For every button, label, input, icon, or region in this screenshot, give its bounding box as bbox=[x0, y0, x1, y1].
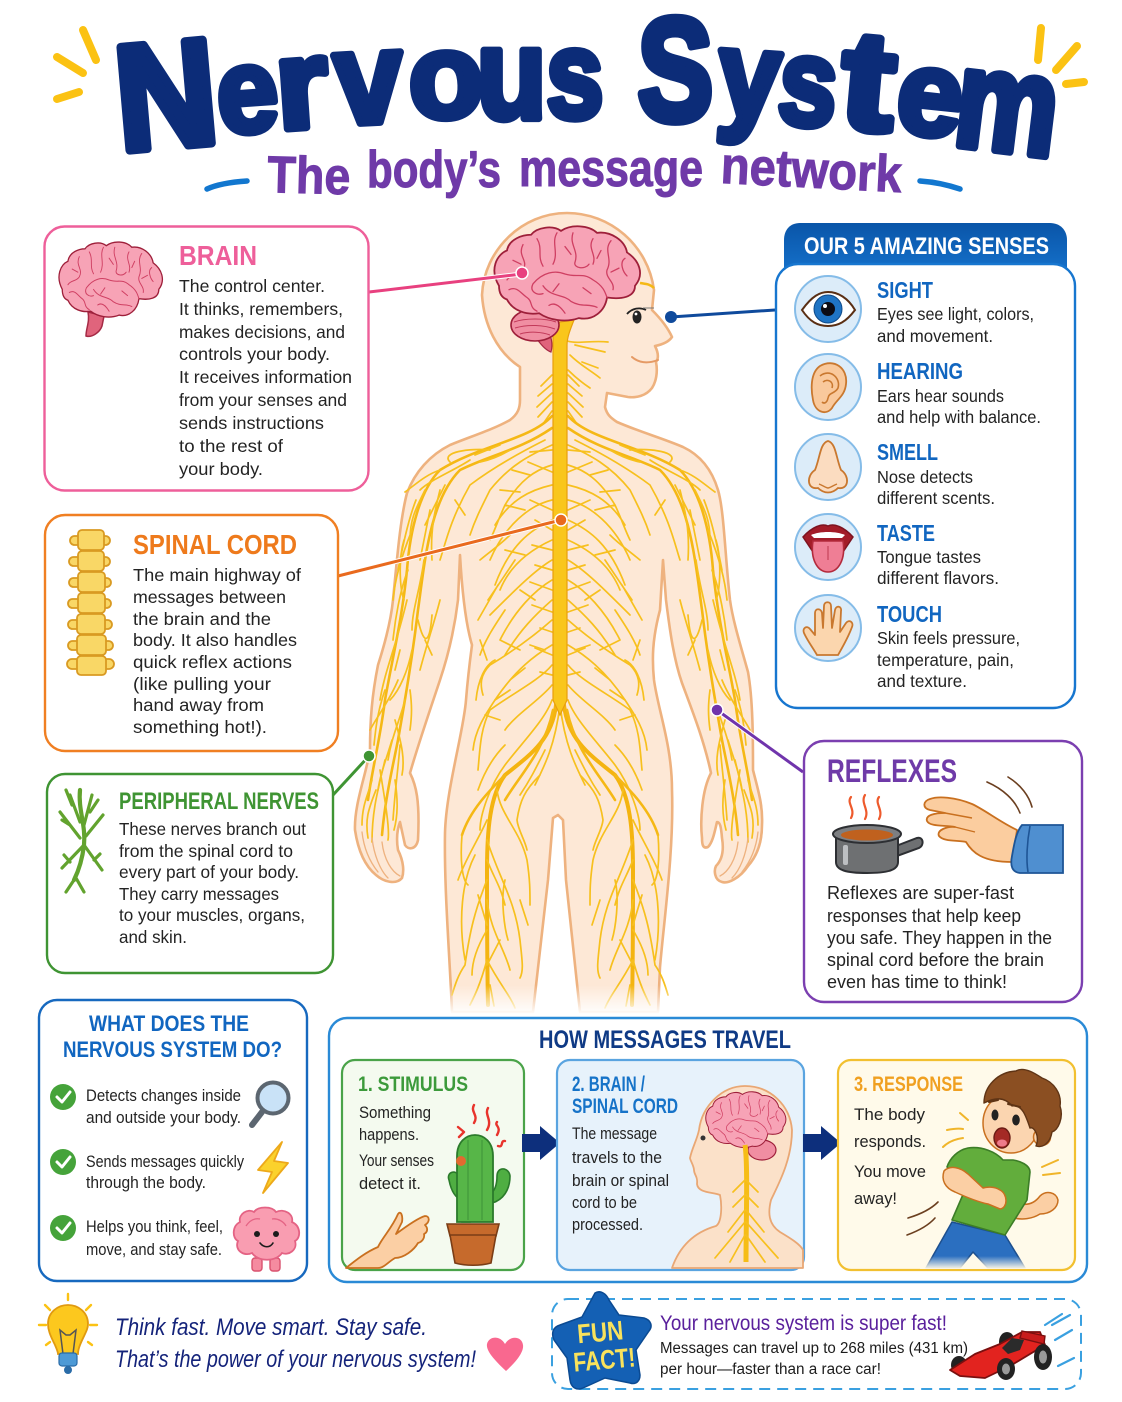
step 2: brain or spinal bbox=[572, 1172, 669, 1190]
sense: hearing bbox=[795, 354, 1041, 427]
step 2: travels to the bbox=[572, 1149, 662, 1167]
heading: SPINAL CORD bbox=[133, 529, 297, 560]
item: sends: Sends messages quickly bbox=[86, 1153, 245, 1171]
panel: spinal cord bbox=[45, 515, 338, 751]
item: detects: Detects changes inside bbox=[86, 1087, 241, 1105]
sunburst left bbox=[57, 30, 96, 99]
heading: WHAT DOES THE bbox=[89, 1011, 249, 1036]
icon: hand pulling away bbox=[924, 777, 1063, 873]
panel: brain bbox=[44, 226, 368, 490]
icon: race car bbox=[950, 1314, 1074, 1380]
sense: taste bbox=[795, 514, 999, 588]
text block: (like pulling your bbox=[133, 674, 271, 694]
connector: senses bbox=[665, 310, 775, 323]
shirt bbox=[947, 1148, 1030, 1235]
cerebellum bbox=[511, 309, 559, 341]
text block bbox=[179, 276, 352, 479]
jeans bbox=[926, 1222, 1025, 1268]
icon: hand bbox=[346, 1213, 429, 1268]
subtitle bbox=[267, 137, 903, 206]
heading: u bbox=[477, 2, 546, 146]
step 3: 3. RESPONSE bbox=[854, 1073, 963, 1096]
panel: how messages travel bbox=[329, 1018, 1087, 1282]
heading: s bbox=[773, 12, 844, 154]
sense: smell: Nose detects bbox=[877, 467, 973, 487]
heading: PERIPHERAL NERVES bbox=[119, 788, 319, 815]
text block: something hot!). bbox=[133, 717, 267, 737]
text block bbox=[133, 565, 301, 737]
icon: magnifying glass bbox=[252, 1082, 288, 1125]
sense: sight: SIGHT bbox=[877, 277, 933, 303]
sense: touch: and texture. bbox=[877, 671, 967, 691]
icon: hot pot bbox=[833, 795, 923, 873]
text block: you safe. They happen in the bbox=[827, 928, 1052, 948]
subtitle dashes bbox=[207, 181, 960, 189]
body diagram bbox=[355, 213, 762, 1015]
badge: star: FACT! bbox=[572, 1342, 636, 1378]
item: helps: Helps you think, feel, bbox=[86, 1218, 223, 1236]
text block: makes decisions, and bbox=[179, 322, 345, 342]
sense: sight: and movement. bbox=[877, 326, 993, 346]
step 2: 2. BRAIN / bbox=[572, 1073, 645, 1096]
text block: sends instructions bbox=[179, 413, 324, 433]
heading: N bbox=[108, 7, 224, 183]
step 2: cord to be bbox=[572, 1194, 637, 1212]
sense: touch: temperature, pain, bbox=[877, 650, 1014, 670]
heading: Your nervous system is super fast! bbox=[660, 1312, 947, 1335]
step 3: The body bbox=[854, 1106, 926, 1124]
eye bbox=[627, 308, 654, 324]
hair bbox=[984, 1069, 1061, 1146]
text block: That’s the power of your nervous system! bbox=[115, 1346, 476, 1373]
text block: per hour—faster than a race car! bbox=[660, 1361, 881, 1378]
text block: from the spinal cord to bbox=[119, 841, 293, 861]
spinal cord bbox=[553, 320, 574, 715]
text block: spinal cord before the brain bbox=[827, 950, 1044, 970]
arrow 1 bbox=[522, 1126, 560, 1160]
step 1: Your senses bbox=[359, 1152, 434, 1170]
badge: star bbox=[553, 1292, 651, 1389]
text block: It receives information bbox=[179, 367, 352, 387]
heading: REFLEXES bbox=[827, 753, 957, 789]
heading: s bbox=[546, 7, 603, 145]
item: sends: through the body. bbox=[86, 1174, 206, 1192]
sense: taste: Tongue tastes bbox=[877, 547, 981, 567]
text block bbox=[115, 1314, 476, 1373]
text block: It thinks, remembers, bbox=[179, 299, 343, 319]
item: helps: move, and stay safe. bbox=[86, 1241, 222, 1259]
text block: and skin. bbox=[119, 927, 187, 947]
panel: what does the nervous system do bbox=[39, 1000, 307, 1281]
step 3 bbox=[838, 1060, 1075, 1270]
text block: The main highway of bbox=[133, 565, 301, 585]
text block bbox=[660, 1340, 968, 1378]
connector: spinal cord bbox=[338, 514, 567, 576]
motion lines bbox=[943, 1113, 1060, 1175]
step 2: processed. bbox=[572, 1216, 643, 1234]
icon: lightning bolt bbox=[258, 1142, 288, 1193]
heading: HOW MESSAGES TRAVEL bbox=[539, 1026, 791, 1054]
icon: smiling brain bbox=[234, 1208, 299, 1271]
heading bbox=[63, 1011, 282, 1062]
text block: to your muscles, organs, bbox=[119, 905, 305, 925]
step 1 bbox=[342, 1060, 524, 1270]
heading bbox=[108, 0, 1068, 187]
badge: star: FUN bbox=[576, 1315, 625, 1349]
step 3: You move bbox=[854, 1163, 926, 1181]
sense: hearing: HEARING bbox=[877, 358, 963, 384]
text block: from your senses and bbox=[179, 390, 347, 410]
heading: v bbox=[331, 3, 406, 152]
heading: NERVOUS SYSTEM DO? bbox=[63, 1037, 282, 1062]
step 1: Something bbox=[359, 1104, 431, 1122]
sense: touch bbox=[795, 595, 1020, 691]
panel: reflexes bbox=[804, 741, 1082, 1002]
text block: They carry messages bbox=[119, 884, 279, 904]
text block: Messages can travel up to 268 miles (431 km) bbox=[660, 1340, 968, 1357]
connector: peripheral nerves bbox=[333, 750, 375, 795]
panel: five senses bbox=[776, 223, 1075, 708]
nerves left and mirrored right bbox=[362, 340, 758, 1008]
step fade bbox=[920, 1256, 1040, 1269]
heading: o bbox=[406, 7, 485, 144]
icon: nerve branches bbox=[60, 790, 103, 892]
sense: hearing: Ears hear sounds bbox=[877, 386, 1004, 406]
text block: Reflexes are super-fast bbox=[827, 883, 1014, 903]
subtitle: message bbox=[519, 140, 703, 198]
icon: red alert squiggles bbox=[458, 1105, 505, 1146]
sense: hearing: and help with balance. bbox=[877, 407, 1041, 427]
near arm and hand bbox=[943, 1167, 1006, 1209]
text block: to the rest of bbox=[179, 436, 283, 456]
heading: BRAIN bbox=[179, 240, 257, 271]
panel frame bbox=[776, 264, 1075, 708]
text block bbox=[119, 819, 306, 947]
heading: y bbox=[713, 5, 786, 147]
text block: even has time to think! bbox=[827, 972, 1007, 992]
step 1: detect it. bbox=[359, 1175, 421, 1193]
arrow 2 bbox=[803, 1126, 841, 1160]
nose and mouth lines bbox=[632, 357, 658, 362]
icon: spine bbox=[67, 530, 114, 675]
ear line bbox=[640, 283, 654, 288]
body silhouette bbox=[355, 213, 762, 1012]
sense: taste: TASTE bbox=[877, 520, 935, 546]
brain bbox=[494, 226, 640, 321]
text block: These nerves branch out bbox=[119, 819, 306, 839]
sense: touch: TOUCH bbox=[877, 601, 942, 627]
step 3: responds. bbox=[854, 1133, 926, 1151]
icon: head with brain and spine bbox=[672, 1086, 803, 1268]
text block: body. It also handles bbox=[133, 630, 297, 650]
heading: m bbox=[947, 20, 1068, 187]
text block: The control center. bbox=[179, 276, 325, 296]
step 1: 1. STIMULUS bbox=[358, 1073, 468, 1096]
connector: brain bbox=[369, 267, 528, 292]
text block: messages between bbox=[133, 587, 286, 607]
tab header bbox=[784, 223, 1067, 275]
item: detects bbox=[50, 1084, 241, 1127]
callout: motto bbox=[39, 1294, 523, 1374]
icon: heart bbox=[487, 1338, 523, 1371]
item: detects: and outside your body. bbox=[86, 1109, 241, 1127]
sense: sight bbox=[795, 276, 1034, 346]
text block: quick reflex actions bbox=[133, 652, 292, 672]
step 2: SPINAL CORD bbox=[572, 1095, 678, 1118]
text block bbox=[827, 883, 1052, 992]
item: helps bbox=[50, 1215, 223, 1259]
text block: controls your body. bbox=[179, 344, 330, 364]
step 1: happens. bbox=[359, 1126, 419, 1144]
callout: fun fact bbox=[552, 1292, 1081, 1389]
icon: cactus bbox=[447, 1135, 510, 1265]
sense: smell bbox=[795, 434, 995, 508]
step 2: The message bbox=[572, 1125, 657, 1143]
item: sends bbox=[50, 1149, 245, 1192]
tab title: OUR 5 AMAZING SENSES bbox=[804, 233, 1049, 260]
step 3: away! bbox=[854, 1190, 897, 1208]
text block: responses that help keep bbox=[827, 906, 1021, 926]
heading: e bbox=[212, 22, 282, 160]
leg fade bbox=[440, 985, 675, 1015]
text block: your body. bbox=[179, 459, 263, 479]
sense: taste: different flavors. bbox=[877, 568, 999, 588]
text block: hand away from bbox=[133, 695, 264, 715]
subtitle: body’s bbox=[367, 141, 501, 199]
sense: sight: Eyes see light, colors, bbox=[877, 304, 1034, 324]
sense: smell: SMELL bbox=[877, 439, 938, 465]
connector: reflexes bbox=[711, 704, 803, 772]
subtitle: The bbox=[267, 146, 351, 206]
heading: r bbox=[270, 11, 333, 156]
text block: every part of your body. bbox=[119, 862, 299, 882]
icon: light bulb bbox=[39, 1294, 97, 1374]
sense: touch: Skin feels pressure, bbox=[877, 628, 1020, 648]
head bbox=[983, 1093, 1039, 1153]
icon: boy bbox=[907, 1069, 1061, 1268]
text block: Think fast. Move smart. Stay safe. bbox=[115, 1314, 427, 1341]
subtitle: network bbox=[719, 137, 903, 204]
panel: peripheral nerves bbox=[47, 774, 333, 973]
brain stem bbox=[536, 325, 552, 352]
title bbox=[57, 0, 1084, 206]
ear bbox=[1034, 1128, 1050, 1146]
far arm and hand bbox=[1014, 1193, 1058, 1219]
sense: smell: different scents. bbox=[877, 488, 995, 508]
heading: e bbox=[891, 24, 970, 164]
sunburst right bbox=[1038, 28, 1084, 84]
icon: brain bbox=[59, 242, 162, 336]
heading: t bbox=[835, 1, 902, 161]
text block: the brain and the bbox=[133, 609, 271, 629]
face bbox=[992, 1110, 998, 1120]
step 2 bbox=[557, 1060, 804, 1270]
